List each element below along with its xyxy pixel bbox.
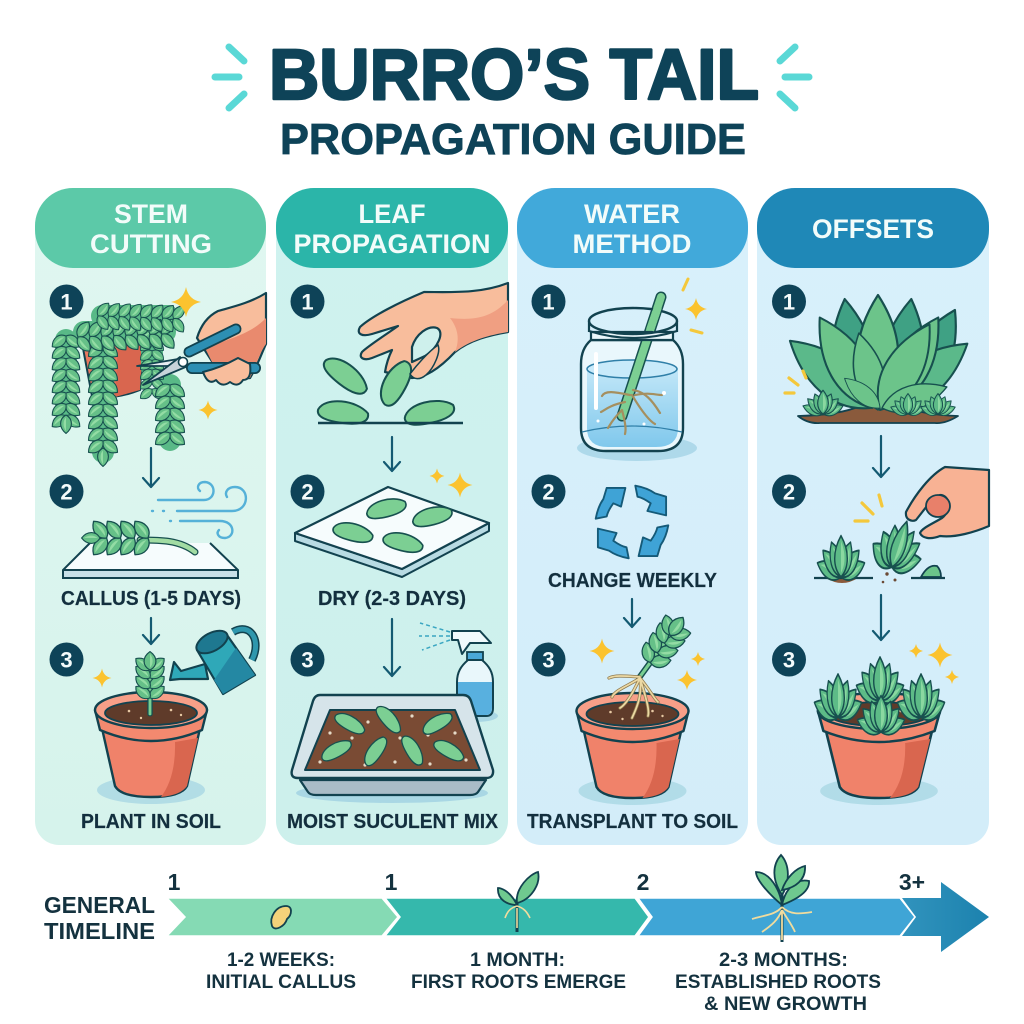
panel background <box>35 200 266 845</box>
step badge 2: 2 <box>60 480 73 504</box>
panel header <box>757 188 989 268</box>
timeline caption 2: FIRST ROOTS EMERGE <box>411 971 626 993</box>
panel header: PROPAGATION <box>294 229 490 259</box>
icon: sparkle with rays <box>683 279 707 333</box>
icon: sparkles <box>909 642 959 684</box>
timeline caption 1: INITIAL CALLUS <box>206 971 356 993</box>
icon: spray bottle <box>419 623 498 722</box>
arrow <box>624 599 640 627</box>
timeline caption 1: 1-2 WEEKS: <box>227 949 335 971</box>
timeline numbers: 1 <box>385 869 398 895</box>
illustration: potted cutting <box>95 652 207 804</box>
step badge 2 <box>772 474 806 508</box>
step badge 1 <box>50 284 84 318</box>
subtitle: PROPAGATION GUIDE <box>280 115 746 164</box>
icon: sparkles <box>590 638 705 690</box>
step badge 3: 3 <box>542 648 555 672</box>
timeline segment 2 <box>385 898 649 936</box>
label: DRY (2-3 DAYS) <box>318 588 466 610</box>
timeline label <box>44 892 155 944</box>
panel background <box>757 200 989 845</box>
step badge 2 <box>532 474 566 508</box>
arrow <box>873 595 889 640</box>
step badge 2 <box>290 474 324 508</box>
icon: callus bean <box>271 906 291 928</box>
timeline label: GENERAL <box>44 892 155 918</box>
step badge 1: 1 <box>542 290 555 314</box>
icon: yellow rays <box>785 371 806 393</box>
timeline segment 3 <box>638 898 915 936</box>
timeline caption 2 <box>411 949 626 993</box>
step badge 1: 1 <box>301 290 314 314</box>
arrow <box>143 618 159 644</box>
arrow <box>384 437 400 471</box>
panel: stem cutting <box>35 188 266 845</box>
illustration: hand with scissors <box>137 293 266 385</box>
illustration: hand removing offset <box>814 467 989 585</box>
panel header: STEM <box>114 199 188 229</box>
arrow <box>143 448 159 487</box>
label: MOIST SUCULENT MIX <box>287 811 499 833</box>
timeline caption 3 <box>675 949 881 1015</box>
icon: sparkle large <box>171 287 201 317</box>
timeline caption 1 <box>206 949 356 993</box>
panel header <box>276 188 508 268</box>
title decoration: right rays <box>780 47 809 108</box>
timeline caption 3: & NEW GROWTH <box>704 993 867 1015</box>
step badge 1 <box>290 284 324 318</box>
step badge 1: 1 <box>783 290 795 314</box>
timeline segment 4 arrow <box>902 882 989 952</box>
illustration: mother rosette with offsets <box>778 295 979 423</box>
icon: watering can <box>170 626 256 694</box>
illustration: hanging burro's tail plant <box>49 300 188 466</box>
panel header: WATER <box>584 199 680 229</box>
panel: offsets <box>757 188 989 845</box>
timeline numbers: 2 <box>637 869 649 895</box>
timeline label: TIMELINE <box>44 918 155 944</box>
icon: sparkle small <box>198 400 218 420</box>
step badge 3 <box>50 642 84 676</box>
timeline numbers <box>168 869 925 895</box>
timeline caption 2: 1 MONTH: <box>470 949 565 971</box>
step badge 1: 1 <box>60 290 73 314</box>
panel header: CUTTING <box>90 229 212 259</box>
panel header: OFFSETS <box>812 214 934 244</box>
icon: yellow rays <box>855 495 882 521</box>
step badge 2: 2 <box>542 480 555 504</box>
panel header <box>35 188 266 268</box>
step badge 3: 3 <box>783 648 795 672</box>
panel header: METHOD <box>572 229 692 259</box>
panel header: LEAF <box>358 199 426 229</box>
illustration: cutting drying on paper <box>63 518 238 578</box>
title decoration: left rays <box>215 47 244 108</box>
title <box>215 36 809 164</box>
illustration: rooted cutting over pot <box>576 606 699 805</box>
illustration: drying tile with leaves <box>295 487 489 577</box>
label: CHANGE WEEKLY <box>548 570 718 592</box>
step badge 1 <box>532 284 566 318</box>
icon: refresh arrows cycle <box>596 486 668 558</box>
timeline <box>44 855 989 1015</box>
panel: leaf propagation <box>276 188 508 845</box>
panel: water method <box>517 188 748 845</box>
title: main heading: BURRO’S TAIL <box>269 36 759 115</box>
step badge 3 <box>290 642 324 676</box>
illustration: tray of moist soil with leaves <box>292 695 493 803</box>
step badge 2: 2 <box>783 480 795 504</box>
step badge 3 <box>532 642 566 676</box>
step badge 3: 3 <box>301 648 314 672</box>
step badge 2: 2 <box>301 480 314 504</box>
illustration: hand placing leaves <box>317 283 508 428</box>
arrow <box>384 619 400 676</box>
timeline segment 1 <box>167 898 398 936</box>
icon: sparkle <box>92 668 112 688</box>
label: PLANT IN SOIL <box>81 811 221 833</box>
arrow <box>873 436 889 477</box>
timeline caption 3: 2-3 MONTHS: <box>719 949 848 971</box>
panel header <box>517 188 748 268</box>
label: CALLUS (1-5 DAYS) <box>61 588 241 610</box>
icon: established plant with roots <box>752 855 812 942</box>
step badge 1 <box>772 284 806 318</box>
icon: wind <box>152 482 246 538</box>
illustration: jar with stem in water <box>577 297 697 461</box>
step badge 2 <box>50 474 84 508</box>
panel background <box>276 200 508 845</box>
panel background <box>517 200 748 845</box>
timeline numbers: 1 <box>168 869 181 895</box>
step badge 3 <box>772 642 806 676</box>
timeline caption 3: ESTABLISHED ROOTS <box>675 971 881 993</box>
label: TRANSPLANT TO SOIL <box>527 811 738 833</box>
timeline numbers: 3+ <box>899 869 925 895</box>
illustration: pot with new rosettes <box>812 657 947 805</box>
icon: sprout <box>498 872 538 932</box>
step badge 3: 3 <box>60 648 73 672</box>
icon: sparkles <box>430 468 472 498</box>
